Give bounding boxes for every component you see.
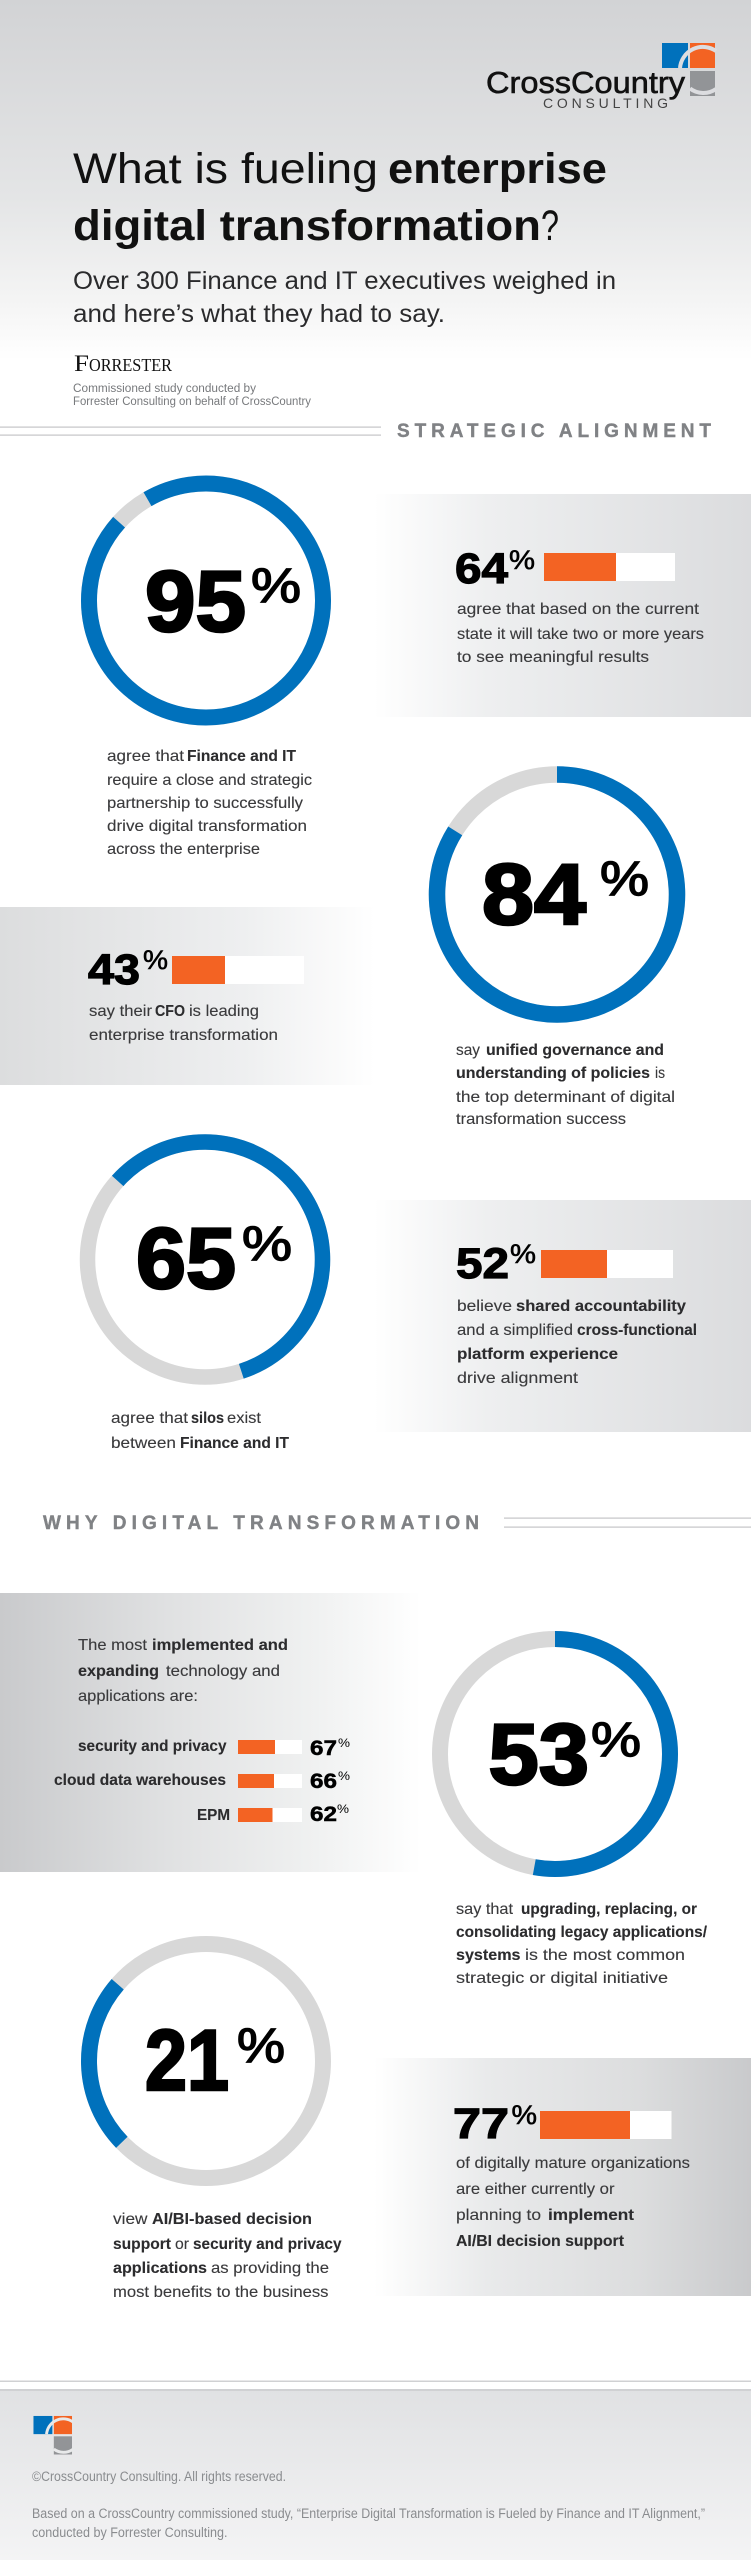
text: 95% description: drive digital transformation xyxy=(107,818,307,835)
footer xyxy=(0,2389,751,2560)
text: intro: implemented and xyxy=(152,1637,288,1654)
ring chart 21: 21 xyxy=(145,2013,229,2109)
bar row: EPM: % xyxy=(337,1802,349,1816)
text: 77% description xyxy=(456,2155,690,2250)
ring chart 84 xyxy=(437,774,677,1014)
panel: 77% stat xyxy=(374,2058,751,2296)
text: 52% description: cross-functional xyxy=(577,1322,697,1339)
panel: 65% ring xyxy=(39,1094,371,1452)
text: source note: conducted by Forrester Consulting. xyxy=(32,2525,228,2540)
ring chart 53 xyxy=(440,1639,670,1869)
text: 65% description xyxy=(111,1410,289,1452)
ring chart 53: 53 xyxy=(488,1707,589,1803)
text: 84% description: transformation success xyxy=(456,1111,626,1128)
text: 64% description: agree that based on the current xyxy=(457,601,700,618)
stat value 77% xyxy=(453,2100,537,2148)
text: 53% description: upgrading, replacing, or xyxy=(521,1901,697,1918)
bar row: EPM: EPM xyxy=(197,1807,230,1824)
title: What is fueling xyxy=(73,145,378,193)
panel: most implemented technology xyxy=(0,1593,421,1872)
stat value 77%: 77 xyxy=(453,2100,509,2148)
ring chart 53: % xyxy=(591,1714,641,1767)
progress bar 52% xyxy=(541,1250,673,1278)
stat value 64%: % xyxy=(509,545,535,575)
ring chart 95 xyxy=(46,441,366,760)
stat value 52%: % xyxy=(510,1239,536,1269)
ring chart 65: % xyxy=(242,1218,292,1271)
text: 21% description: view xyxy=(113,2211,148,2228)
text: 64% description: to see meaningful results xyxy=(457,649,649,666)
text: 95% description: agree that xyxy=(107,748,185,765)
ring chart 95: % xyxy=(251,560,301,613)
text: 65% description: Finance and IT xyxy=(180,1435,289,1452)
text: 53% description: systems xyxy=(456,1947,521,1964)
ring chart 21 xyxy=(41,1896,371,2226)
text: 52% description: believe xyxy=(457,1298,512,1315)
stat value 43%: 43 xyxy=(88,946,140,994)
panel: 43% stat xyxy=(0,907,375,1085)
Forrester logotype xyxy=(74,351,172,376)
title: digital transformation xyxy=(73,202,541,250)
text: 52% description: shared accountability xyxy=(516,1298,686,1315)
text: copyright: ©CrossCountry Consulting. All rights reserved. xyxy=(32,2469,286,2484)
text: 95% description: Finance and IT xyxy=(187,748,296,765)
logo: CrossCountry Consulting: CrossCountry xyxy=(486,65,686,100)
text: 21% description: AI/BI-based decision xyxy=(152,2211,312,2228)
text: 21% description: or xyxy=(175,2236,190,2253)
text: 77% description: are either currently or xyxy=(456,2181,615,2198)
bar row: EPM: 62 xyxy=(310,1803,337,1826)
subtitle xyxy=(73,267,616,328)
text: source note: Based on a CrossCountry commissioned study, “Enterprise Digital Transformation is Fueled by Finance and IT Alignment,” xyxy=(32,2506,705,2521)
bar row: security and privacy: 67 xyxy=(310,1737,337,1760)
text: intro: expanding xyxy=(78,1663,159,1680)
stat value 64%: 64 xyxy=(455,545,508,593)
text: 65% description: between xyxy=(111,1435,176,1452)
ring chart 65 xyxy=(39,1094,371,1425)
panel: 52% stat xyxy=(374,1200,751,1432)
bar row: cloud data warehouses: % xyxy=(338,1769,350,1783)
text: 65% description: silos xyxy=(191,1410,224,1427)
text: 53% description xyxy=(456,1901,708,1987)
text: 77% description: of digitally mature organizations xyxy=(456,2155,690,2172)
text: 43% description xyxy=(89,1003,278,1044)
ring chart 84: % xyxy=(600,853,649,906)
panel: 84% ring xyxy=(437,774,677,1128)
commissioned note xyxy=(73,383,311,408)
header background xyxy=(0,0,751,360)
text: 52% description: platform experience xyxy=(457,1346,618,1363)
heading: why digital transformation: WHY DIGITAL TRANSFORMATION xyxy=(43,1513,479,1534)
progress bar 43% xyxy=(172,956,304,984)
text: 53% description: is the most common xyxy=(525,1947,685,1964)
text: 65% description: agree that xyxy=(111,1410,189,1427)
bar row: EPM xyxy=(197,1802,349,1826)
text: 84% description: say xyxy=(456,1042,480,1059)
panel: 64% stat xyxy=(374,494,751,717)
text: 21% description: most benefits to the business xyxy=(113,2284,328,2301)
text: intro xyxy=(78,1637,288,1705)
text: 84% description: is xyxy=(655,1065,665,1082)
text: 64% description xyxy=(457,601,704,666)
ring chart 65: 65 xyxy=(136,1211,236,1307)
text: 43% description: CFO xyxy=(155,1003,185,1020)
bar row: security and privacy: % xyxy=(338,1736,350,1750)
text: 95% description: partnership to successfully xyxy=(107,795,303,812)
stat value 64% xyxy=(455,545,535,593)
text: 53% description: strategic or digital initiative xyxy=(456,1970,668,1987)
text: 95% description: require a close and strategic xyxy=(107,772,312,789)
text: 43% description: say their xyxy=(89,1003,153,1020)
subtitle: and here’s what they had to say. xyxy=(73,300,445,328)
text: 21% description: applications xyxy=(113,2260,207,2277)
subtitle: Over 300 Finance and IT executives weighed in xyxy=(73,267,616,295)
text: 64% description: state it will take two or more years xyxy=(457,626,704,643)
stat value 52% xyxy=(456,1239,536,1288)
title: ? xyxy=(541,202,559,250)
ring chart 84: 84 xyxy=(482,847,586,943)
panel: 21% ring xyxy=(41,1896,371,2301)
text: intro: The most xyxy=(78,1637,148,1654)
text: 77% description: AI/BI decision support xyxy=(456,2233,625,2250)
text: 21% description: security and privacy xyxy=(193,2236,342,2253)
stat value 43%: % xyxy=(143,945,168,975)
ring chart 95: 95 xyxy=(145,554,246,650)
bar row: cloud data warehouses: cloud data warehouses xyxy=(54,1772,226,1789)
text: 53% description: say that xyxy=(456,1901,514,1918)
panel: 53% ring xyxy=(440,1639,708,1987)
text: 95% description xyxy=(107,748,312,858)
Forrester logotype: F xyxy=(74,351,89,376)
title: enterprise xyxy=(388,145,607,193)
commissioned note: Commissioned study conducted by xyxy=(73,383,256,395)
text: 53% description: consolidating legacy applications/ xyxy=(456,1924,708,1941)
logo: CrossCountry Consulting: CONSULTING xyxy=(543,95,668,111)
text: 84% description xyxy=(456,1042,675,1128)
text: 84% description: understanding of policies xyxy=(456,1065,650,1082)
text: 21% description: support xyxy=(113,2236,172,2253)
logo: CrossCountry Consulting xyxy=(486,43,716,111)
text: 43% description: enterprise transformation xyxy=(89,1027,278,1044)
ring chart 21: % xyxy=(237,2020,285,2073)
stat value 43% xyxy=(88,945,168,994)
text: 21% description: as providing the xyxy=(211,2260,329,2277)
panel: 95% ring xyxy=(46,441,366,858)
text: 84% description: the top determinant of digital xyxy=(456,1089,675,1106)
progress bar 64% xyxy=(544,553,675,581)
text: 65% description: exist xyxy=(227,1410,262,1427)
text: 77% description: planning to xyxy=(456,2207,541,2224)
text: 52% description xyxy=(457,1298,697,1387)
title xyxy=(73,145,607,250)
progress bar 77% xyxy=(540,2111,672,2139)
stat value 52%: 52 xyxy=(456,1240,509,1288)
bar row: security and privacy xyxy=(78,1736,350,1760)
text: 95% description: across the enterprise xyxy=(107,841,260,858)
text: 77% description: implement xyxy=(548,2207,635,2224)
text: 84% description: unified governance and xyxy=(486,1042,664,1059)
text: source note xyxy=(32,2506,705,2540)
icon: footer logo mark xyxy=(33,2416,73,2454)
text: 52% description: and a simplified xyxy=(457,1322,573,1339)
text: 43% description: is leading xyxy=(189,1003,259,1020)
Forrester logotype: ORRESTER xyxy=(89,355,172,375)
text: 52% description: drive alignment xyxy=(457,1370,579,1387)
text: intro: applications are: xyxy=(78,1688,198,1705)
bar row: cloud data warehouses xyxy=(54,1769,350,1793)
bar row: cloud data warehouses: 66 xyxy=(310,1770,337,1793)
stat value 77%: % xyxy=(512,2100,537,2130)
commissioned note: Forrester Consulting on behalf of CrossCountry xyxy=(73,396,311,408)
text: 21% description xyxy=(113,2211,342,2301)
bar row: security and privacy: security and privacy xyxy=(78,1738,227,1755)
text: intro: technology and xyxy=(166,1663,280,1680)
heading: strategic alignment: STRATEGIC ALIGNMENT xyxy=(397,421,711,442)
